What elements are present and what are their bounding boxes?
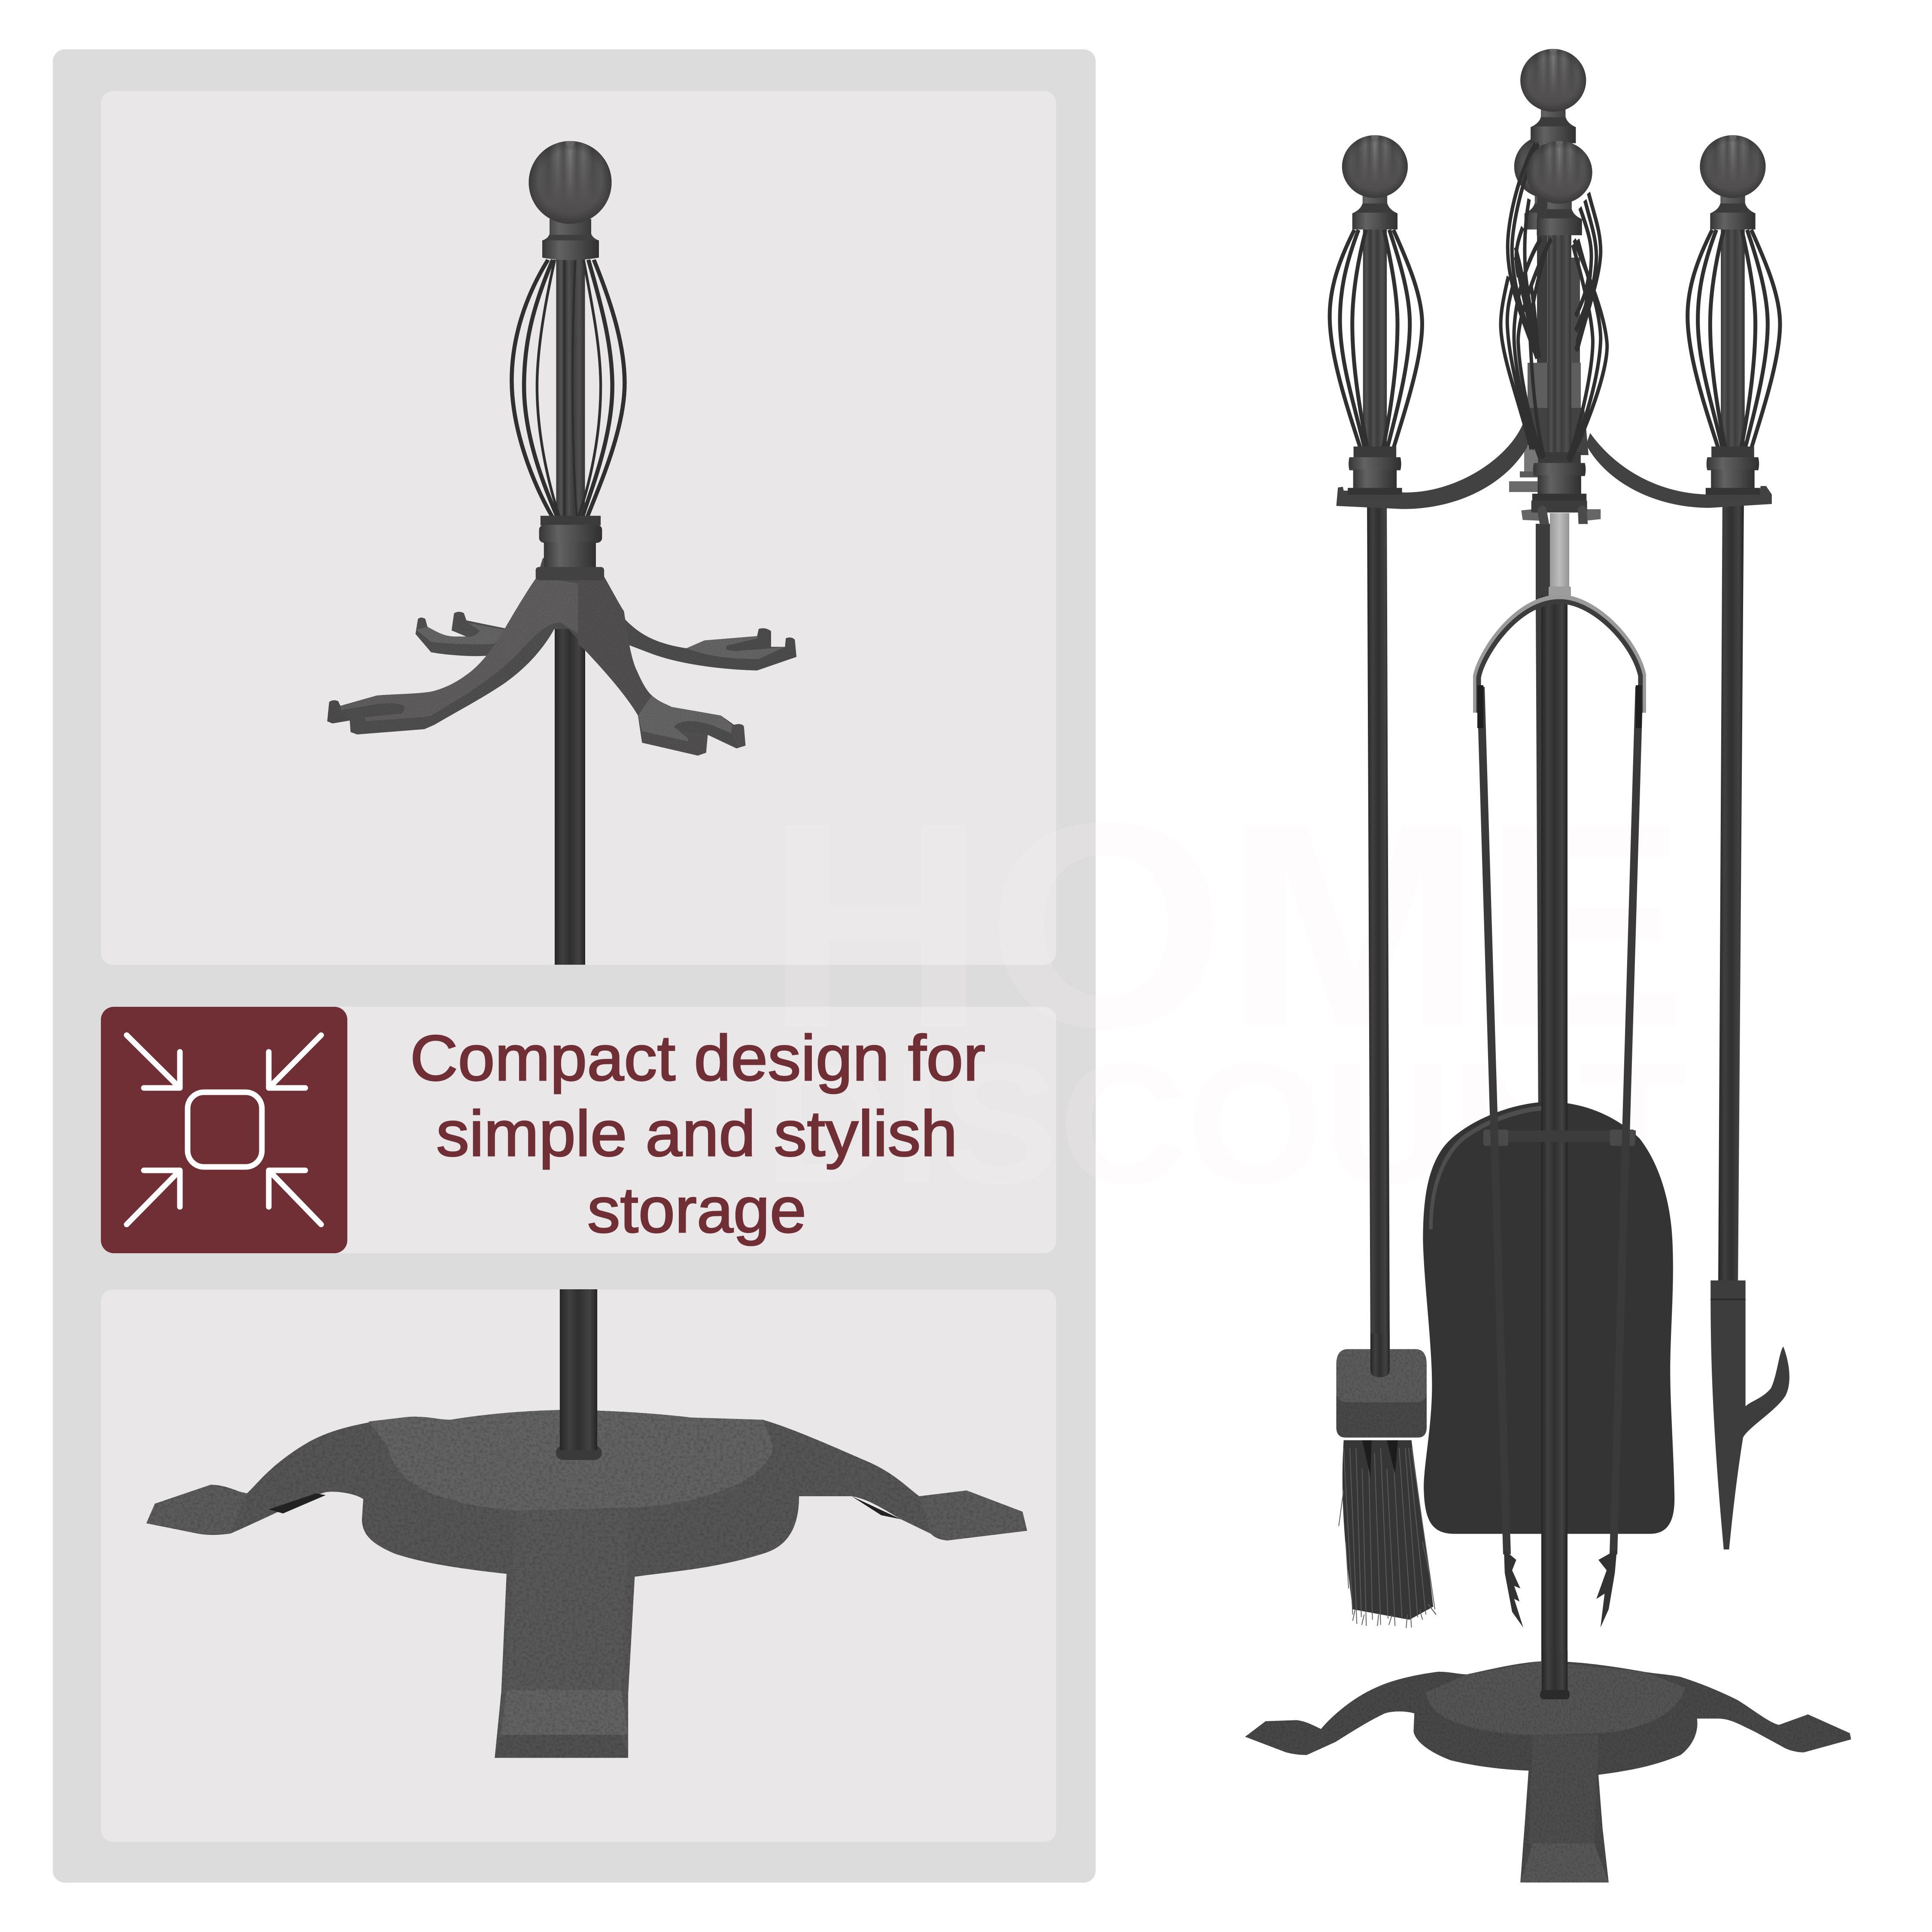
poker head	[1710, 1280, 1789, 1549]
light shaft segment	[1550, 513, 1569, 588]
front shaft and collar	[1532, 234, 1586, 501]
pole below hooks	[555, 618, 585, 965]
product: back tools and twisted wires	[1508, 49, 1601, 492]
front left hook arm and body	[327, 558, 580, 735]
front right hook arm	[578, 572, 746, 756]
rear lower collar	[1528, 363, 1581, 410]
product: shovel	[1423, 1102, 1674, 1534]
left hook arm	[1336, 419, 1528, 509]
product: front bracket	[1521, 500, 1601, 525]
back tool heads	[1514, 49, 1586, 230]
rear casting centre	[1528, 408, 1589, 455]
product: stand shaft and rods	[1536, 513, 1571, 1211]
panel: text strip background	[101, 1007, 1056, 1253]
panel: upper close-up background	[101, 91, 1056, 965]
handle rod and whisk wires	[512, 257, 625, 519]
tong arch	[1476, 597, 1643, 713]
lower collar	[536, 516, 604, 580]
tong legs	[1481, 687, 1639, 1554]
pole collar	[556, 1446, 602, 1460]
brush head	[1336, 1349, 1427, 1437]
panel detail: lower close-up of weighted base	[146, 1289, 1027, 1758]
brush pole end	[1370, 1334, 1390, 1377]
watermark: faint house logo	[301, 773, 670, 1202]
tong rivet bars	[1477, 685, 1483, 728]
front twisted wires	[1501, 238, 1607, 460]
brush bristles	[1339, 1440, 1436, 1628]
watermark: brand text	[764, 762, 1687, 1219]
back rod	[1536, 524, 1550, 610]
product: front handles and hook arms	[1330, 135, 1780, 509]
left foot top	[146, 1485, 247, 1534]
panel: lower close-up background	[101, 1289, 1056, 1842]
front foot	[501, 1690, 628, 1735]
icon box: compact arrows	[101, 1007, 347, 1253]
watermark: brand text: HOME	[764, 762, 1687, 1088]
right whisk handle	[1688, 135, 1780, 495]
pole	[560, 1289, 597, 1450]
front ball head	[1527, 141, 1592, 235]
product: tongs	[1476, 597, 1643, 1554]
product: front handle	[1501, 141, 1607, 501]
product: stand shaft	[1541, 596, 1567, 1695]
tong right claw	[1596, 1549, 1617, 1628]
product: lower tools	[1245, 1280, 1851, 1883]
rear left hook arm	[416, 612, 512, 656]
heading: storage statement: storage	[587, 1174, 806, 1246]
right hook arm	[1586, 433, 1772, 508]
tong left claw	[1504, 1549, 1523, 1628]
back rods	[1537, 189, 1547, 369]
heading: storage statement	[410, 1022, 985, 1246]
panel detail: upper close-up of stand top with hooks	[327, 141, 796, 965]
disc top surface	[368, 1410, 773, 1510]
left whisk handle	[1330, 135, 1422, 495]
heading: storage statement: simple and stylish	[436, 1097, 957, 1170]
stand base	[1245, 1661, 1851, 1883]
ball finial	[529, 141, 611, 260]
tong crossbar	[1483, 1130, 1636, 1142]
rear right hook arm	[617, 611, 796, 671]
stand collar	[1540, 1690, 1570, 1699]
base casting	[146, 1410, 1027, 1758]
nut	[1549, 586, 1571, 597]
front leg top	[507, 1510, 628, 1690]
heading: storage statement: Compact design for	[410, 1022, 985, 1094]
right foot top	[919, 1491, 1027, 1540]
product: tapered side poles	[1367, 494, 1744, 1352]
watermark: brand text: DISCOUNT	[764, 1027, 1687, 1219]
back wires	[1508, 143, 1601, 358]
stand shaft foot	[1542, 1651, 1567, 1692]
rear rod and flange	[1509, 447, 1541, 492]
panel: left container	[53, 49, 1096, 1883]
under-base shadows	[269, 1493, 326, 1513]
